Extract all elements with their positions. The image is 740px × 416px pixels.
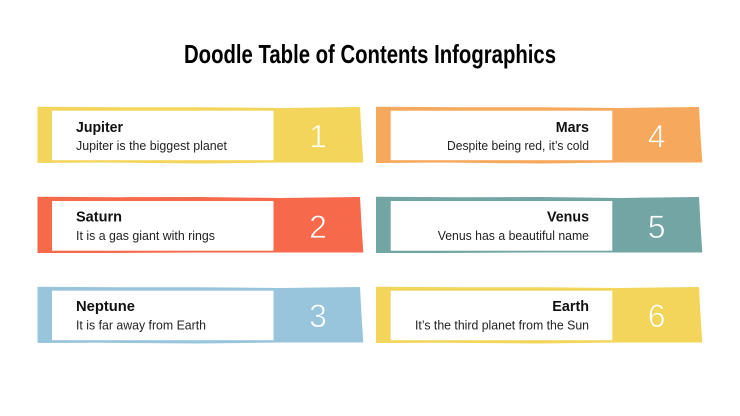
band: orange bbox=[376, 107, 702, 164]
number 2: 2 bbox=[309, 209, 327, 245]
description: Despite being red, it’s cold bbox=[447, 139, 589, 153]
heading: Venus: Venus bbox=[547, 209, 589, 226]
band: red bbox=[38, 197, 363, 253]
panel: Mars bbox=[376, 107, 702, 164]
heading: Saturn: Saturn bbox=[76, 209, 122, 226]
band: teal bbox=[376, 197, 702, 253]
description: It is far away from Earth bbox=[76, 318, 206, 332]
panel: Venus bbox=[376, 197, 702, 253]
number 4: 4 bbox=[648, 118, 666, 154]
panel: Saturn bbox=[38, 197, 363, 253]
heading: Neptune: Neptune bbox=[76, 298, 135, 315]
number 3: 3 bbox=[309, 298, 327, 334]
number 6: 6 bbox=[648, 298, 666, 334]
description: It’s the third planet from the Sun bbox=[415, 318, 589, 332]
band: blue bbox=[38, 287, 363, 344]
text box bbox=[391, 111, 612, 160]
text box bbox=[391, 201, 612, 251]
number 1: 1 bbox=[309, 118, 327, 154]
heading: Jupiter: Jupiter bbox=[76, 119, 123, 136]
text box bbox=[52, 291, 274, 340]
text box bbox=[52, 201, 274, 251]
title: Doodle Table of Contents Infographics bbox=[184, 39, 556, 69]
panel: Jupiter bbox=[38, 107, 363, 164]
band: yellow bbox=[376, 287, 702, 344]
text box bbox=[391, 291, 612, 340]
description: Jupiter is the biggest planet bbox=[76, 139, 228, 153]
text box bbox=[52, 111, 274, 160]
panel: Neptune bbox=[38, 287, 363, 344]
panel: Earth bbox=[376, 287, 702, 344]
heading: Mars: Mars bbox=[556, 119, 589, 136]
heading: Earth: Earth bbox=[552, 298, 589, 315]
band: yellow bbox=[38, 107, 363, 164]
number 5: 5 bbox=[648, 209, 666, 245]
description: Venus has a beautiful name bbox=[438, 229, 589, 243]
description: It is a gas giant with rings bbox=[76, 229, 215, 243]
